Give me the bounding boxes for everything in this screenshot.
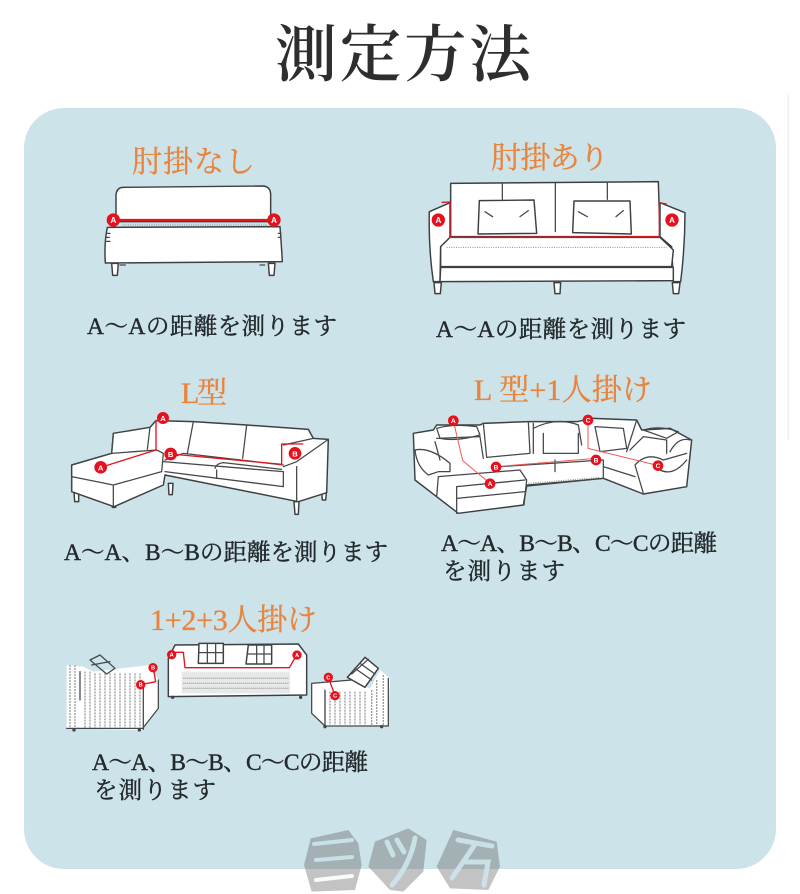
two-seat sofa centre — [168, 643, 307, 699]
A and B markers: B — [292, 449, 298, 458]
caption: A～A、B～B、C～Cの距離 — [92, 749, 368, 776]
A, B and C markers: B — [139, 683, 143, 689]
caption: A～Aの距離を測ります — [87, 313, 337, 340]
caption: A～Aの距離を測ります — [436, 316, 686, 343]
red measure lines — [141, 652, 335, 696]
A and B markers — [94, 412, 301, 474]
caption: A～A、B～Bの距離を測ります — [64, 539, 388, 566]
A, B and C markers: C — [656, 463, 661, 470]
caption: を測ります — [94, 777, 216, 804]
section: sofa with armrests — [429, 142, 686, 343]
illustration: two-seat sofa with arms — [429, 182, 685, 294]
heading: no armrest: 肘掛なし — [132, 146, 255, 179]
armchair right — [312, 657, 390, 728]
caption — [441, 530, 717, 585]
heading: L type + 1 seater: L 型+1人掛け — [474, 374, 652, 407]
A, B and C markers: A — [170, 653, 174, 659]
red measure line A to A: A — [271, 215, 277, 225]
illustration: three separate sofas — [67, 643, 390, 732]
title: 測定方法 — [275, 22, 535, 90]
red measure line A to A — [107, 213, 281, 227]
heading: 1+2+3 seaters: 1+2+3人掛け — [150, 604, 317, 637]
illustration: L-shaped sofa — [72, 412, 328, 514]
A and B markers: A — [98, 463, 104, 472]
red measure line A to A: A — [110, 215, 116, 225]
A markers — [432, 213, 679, 227]
section: L-shaped sofa — [64, 377, 388, 566]
caption: A～A、B～B、C～Cの距離 — [441, 530, 717, 557]
A, B and C markers: C — [333, 694, 337, 700]
A markers: A — [435, 215, 441, 225]
A and B markers: A — [160, 414, 166, 423]
section: L-shaped plus one-seater — [413, 374, 717, 585]
A, B and C markers — [448, 415, 663, 489]
heading: with armrest: 肘掛あり — [491, 142, 609, 175]
A, B and C markers: B — [151, 666, 155, 672]
A and B markers: B — [168, 450, 174, 459]
section: 1+2+3 seater set — [67, 604, 390, 804]
red measure path — [442, 202, 667, 237]
section: sofa without armrests — [87, 146, 337, 340]
watermark cut-outs — [314, 838, 492, 885]
A, B and C markers: B — [594, 457, 599, 464]
A markers: A — [669, 215, 675, 225]
A, B and C markers: A — [295, 653, 299, 659]
illustration: U-shaped sofa set — [413, 415, 692, 513]
red measure lines — [453, 420, 658, 483]
watermark mark — [304, 828, 500, 892]
A, B and C markers: B — [494, 464, 499, 471]
armchair left — [67, 655, 158, 732]
A, B and C markers — [136, 650, 340, 700]
A, B and C markers: C — [586, 417, 591, 424]
caption: を測ります — [443, 558, 565, 585]
heading: L type: L型 — [181, 377, 227, 410]
red measure lines — [101, 420, 303, 467]
A, B and C markers: C — [326, 675, 330, 681]
A, B and C markers: A — [451, 418, 456, 425]
A, B and C markers: A — [488, 481, 493, 488]
illustration: armless sofa — [105, 186, 282, 275]
caption — [92, 749, 368, 804]
